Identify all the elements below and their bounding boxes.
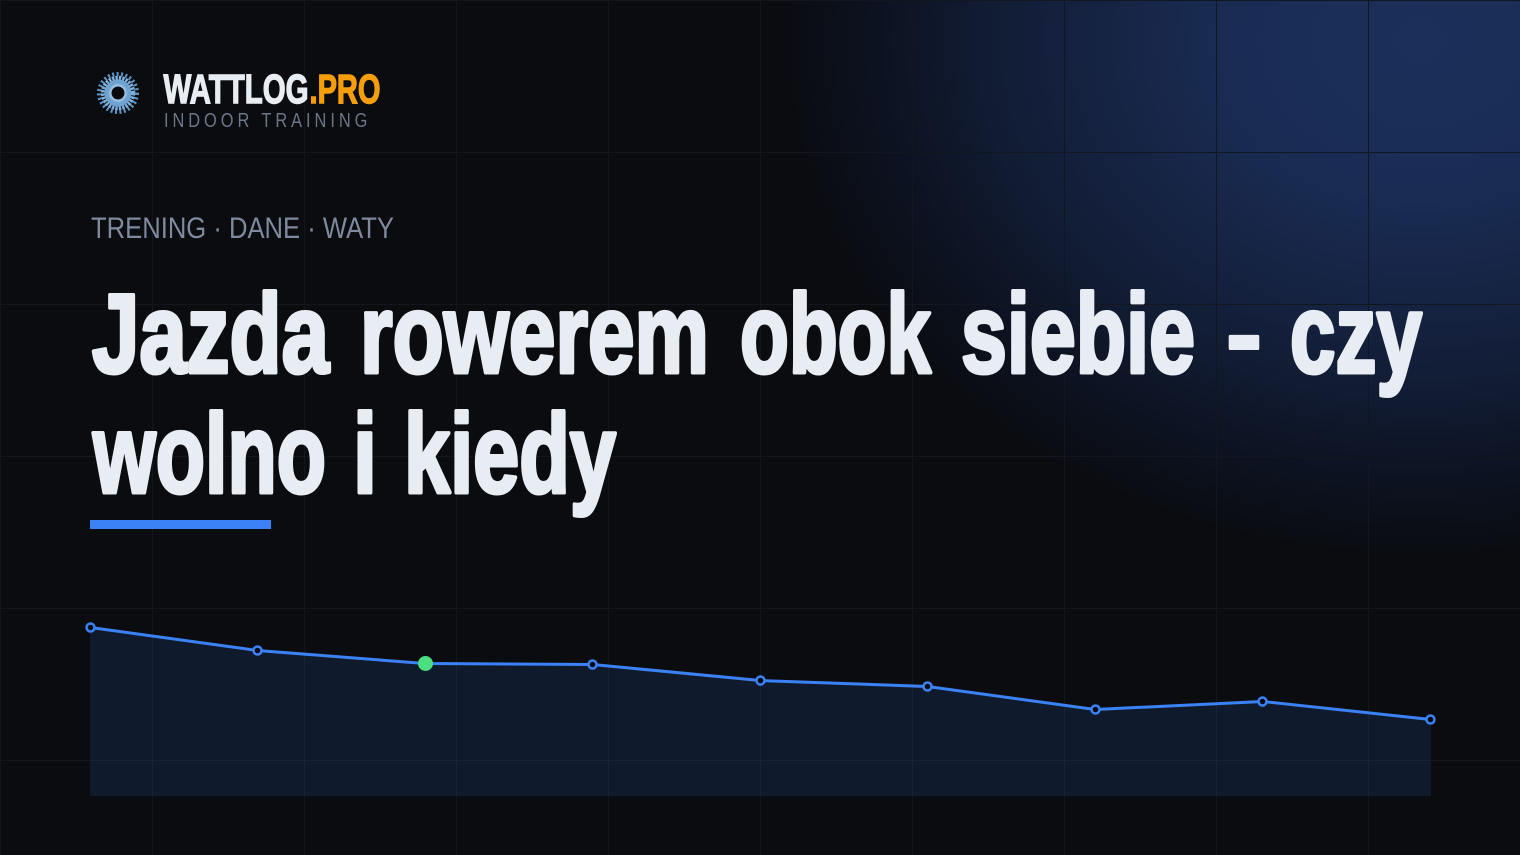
chart area fill — [90, 628, 1431, 796]
chart line — [90, 628, 1430, 720]
title — [92, 272, 1422, 516]
logo wordmark: .PRO — [310, 66, 380, 112]
title: obok — [740, 272, 932, 396]
title: siebie — [961, 272, 1195, 396]
title: – — [1228, 272, 1260, 396]
title: czy — [1290, 272, 1422, 396]
eyebrow text: TRENING · DANE · WATY — [91, 212, 394, 245]
title: kiedy — [404, 392, 616, 516]
title accent bar — [90, 520, 271, 529]
logo wordmark: WATTLOG — [164, 66, 308, 112]
logo tagline: INDOOR TRAINING — [164, 108, 367, 131]
title: wolno — [92, 392, 326, 516]
title: i — [353, 392, 377, 516]
title: Jazda — [92, 272, 330, 396]
title: rowerem — [360, 272, 709, 396]
icon: bicycle cassette gear — [99, 74, 137, 112]
chart data points — [86, 624, 1434, 724]
highlighted green data point — [418, 656, 433, 671]
logo — [99, 66, 380, 131]
line chart — [86, 624, 1434, 796]
